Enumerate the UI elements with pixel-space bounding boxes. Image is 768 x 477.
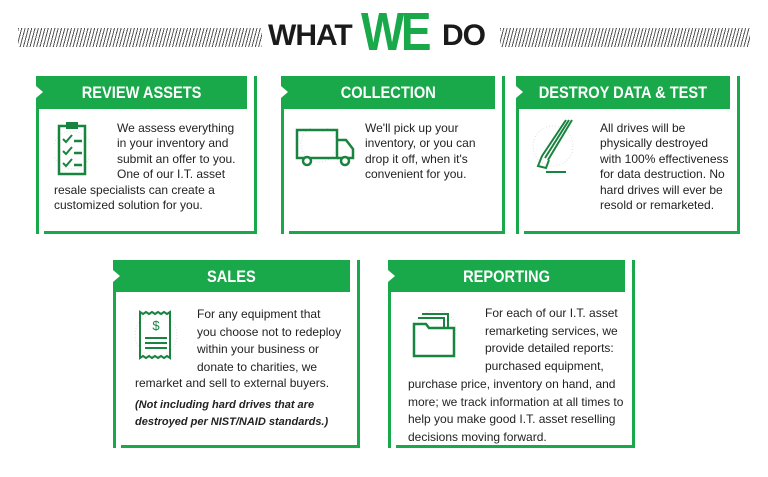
title (18, 2, 750, 62)
note: sales: destroyed per NIST/NAID standards.) (135, 416, 328, 428)
panel: collection (281, 76, 505, 234)
panel: review assets: customized solution for you. (54, 198, 203, 212)
panel: reporting: purchase price, inventory on hand, and (408, 377, 615, 391)
panel: reporting (388, 260, 635, 448)
icon: folder (412, 310, 456, 358)
icon: receipt: $ (152, 318, 160, 333)
heading: destroy data & test: DESTROY DATA & TEST (539, 83, 707, 102)
title: WE (361, 2, 428, 62)
text: review assets: We assess everything (117, 121, 234, 135)
text: destroy data: with 100% effectiveness (600, 152, 729, 166)
heading: collection: COLLECTION (340, 83, 436, 102)
text: destroy data: hard drives will ever be (600, 183, 723, 197)
text: sales (197, 307, 342, 374)
text: destroy data (600, 121, 729, 212)
text: collection: We'll pick up your (365, 121, 458, 135)
panel: reporting: decisions moving forward. (408, 430, 547, 444)
heading: reporting (388, 260, 625, 292)
title: WHAT (268, 19, 352, 52)
title: DO (442, 19, 485, 52)
heading: review assets (36, 76, 247, 109)
text: destroy data: for data destruction. No (600, 167, 725, 181)
icon: receipt (134, 310, 178, 360)
text: reporting: remarketing services, we (485, 324, 618, 338)
panel: review assets: resale specialists can create a (54, 183, 215, 197)
heading: destroy data & test (516, 76, 730, 109)
heading: sales (113, 260, 350, 292)
note: sales (135, 399, 328, 428)
icon: truck (296, 128, 354, 166)
text: reporting: purchased equipment, (485, 359, 604, 373)
panel: review assets (36, 76, 257, 234)
note: sales: (Not including hard drives that are (135, 399, 314, 411)
heading: reporting: REPORTING (463, 267, 550, 286)
text: destroy data: All drives will be (600, 121, 685, 135)
text: reporting: provide detailed reports: (485, 341, 614, 355)
heading: sales: SALES (207, 267, 256, 286)
text: review assets: One of our I.T. asset (117, 167, 225, 181)
text: collection (365, 121, 476, 181)
text: sales: you choose not to redeploy (197, 325, 341, 339)
panel: sales: remarket and sell to external buyers. (135, 376, 329, 390)
heading: collection (281, 76, 495, 109)
text: destroy data: resold or remarketed. (600, 198, 714, 212)
text: destroy data: physically destroyed (600, 136, 708, 150)
heading: review assets: REVIEW ASSETS (82, 83, 201, 102)
icon: shredder blade (532, 120, 574, 173)
text: sales: donate to charities, we (197, 360, 317, 374)
text: review assets: in your inventory and (117, 136, 228, 150)
text: collection: convenient for you. (365, 167, 466, 181)
icon: clipboard (54, 122, 90, 176)
text: review assets (117, 121, 236, 181)
text: sales: within your business or (197, 342, 319, 356)
text: sales: For any equipment that (197, 307, 320, 321)
text: reporting (485, 306, 618, 373)
panel: destroy data & test (516, 76, 740, 234)
panel: reporting: more; we track information at all times to (408, 395, 623, 409)
text: collection: drop it off, when it's (365, 152, 468, 166)
text: reporting: For each of our I.T. asset (485, 306, 618, 320)
text: review assets: submit an offer to you. (117, 152, 236, 166)
panel: sales (113, 260, 360, 448)
panel: reporting: help you make good I.T. asset reselling (408, 412, 615, 426)
text: collection: inventory, or you can (365, 136, 476, 150)
